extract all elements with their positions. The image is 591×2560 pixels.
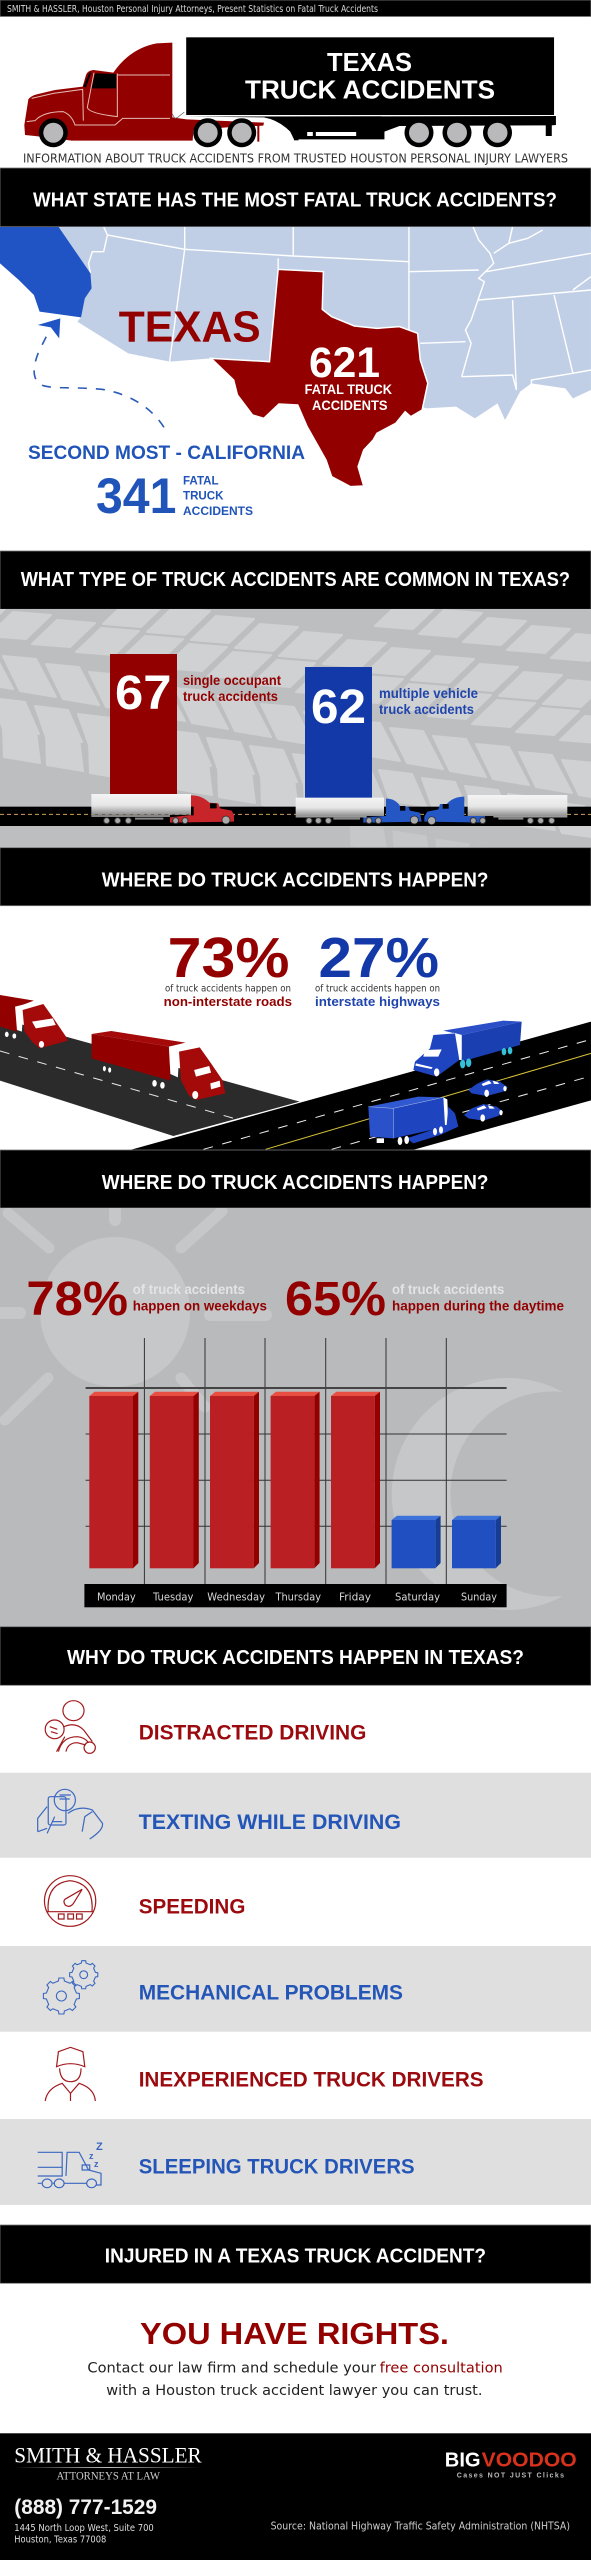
row: distracted driving: [45, 1701, 366, 1753]
California stat 341: [97, 476, 252, 515]
bar chart by weekday: [84, 1338, 507, 1607]
top attribution bar: [0, 0, 591, 16]
stat 73%: non-interstate roads: [164, 994, 292, 1009]
panel: accident types: [0, 609, 591, 848]
US states map: [0, 227, 591, 487]
call to action: with a Houston truck accident lawyer you can trust.: [106, 2383, 483, 2399]
truck wheels: [39, 118, 512, 147]
stat 78%: of truck accidents: [133, 1282, 245, 1297]
agency logo: Cases NOT JUST Clicks: [457, 2472, 564, 2479]
row: texting while driving: TEXTING WHILE DRIVING: [139, 1811, 401, 1834]
heading: where accidents happen (roads): WHERE DO TRUCK ACCIDENTS HAPPEN?: [102, 870, 489, 892]
stat 27%: of truck accidents happen on: [315, 984, 440, 995]
truck tractor cab: [24, 43, 264, 142]
red truck: [91, 794, 234, 824]
road with trucks: [0, 794, 591, 826]
bar: Saturday: [392, 1516, 441, 1568]
icon: gears: [43, 1961, 98, 2014]
firm logo: [14, 2442, 202, 2482]
header truck illustration: [24, 37, 556, 147]
stat 27%: 27%: [318, 926, 439, 990]
bar: Friday: [331, 1392, 380, 1568]
heading: most fatal state: WHAT STATE HAS THE MOST FATAL TRUCK ACCIDENTS?: [33, 190, 557, 212]
stat 78%: 78%: [26, 1273, 128, 1326]
main title: TRUCK ACCIDENTS: [245, 75, 495, 105]
contact details: 1445 North Loop West, Suite 700: [14, 2523, 154, 2534]
stat 27%: [316, 938, 440, 1008]
agency logo: BIG: [445, 2450, 481, 2472]
row: texting while driving: [0, 1773, 591, 1858]
icon: texting: [38, 1789, 103, 1839]
Texas stat 621: [305, 347, 392, 410]
label: single occupant: [183, 675, 281, 701]
heading: most fatal state: [0, 168, 591, 227]
row: mechanical problems: MECHANICAL PROBLEMS: [139, 1981, 403, 2004]
moon background: [392, 1378, 563, 1610]
icon: speedometer: [44, 1876, 96, 1926]
call to action: Contact our law firm and schedule your: [87, 2360, 376, 2376]
heading: why accidents happen: WHY DO TRUCK ACCIDENTS HAPPEN IN TEXAS?: [67, 1647, 524, 1669]
icon: distracted driver: [45, 1701, 95, 1753]
Texas highlighted: [211, 269, 428, 487]
firm logo: ATTORNEYS AT LAW: [56, 2468, 161, 2482]
agency logo: VOODOO: [482, 2450, 577, 2472]
stat 65%: 65%: [285, 1273, 386, 1326]
icon: sleeping truck: z: [94, 2159, 99, 2169]
California stat 341: FATAL: [183, 473, 219, 487]
day labels: Wednesday: [207, 1591, 265, 1604]
contact details: (888) 777-1529: [14, 2496, 157, 2519]
bar: 67 single occupant: 67: [115, 667, 172, 720]
label: single occupant: truck accidents: [183, 689, 278, 704]
main title: TEXAS: [327, 47, 412, 77]
bar: 67 single occupant: [110, 654, 177, 794]
day labels: Saturday: [395, 1591, 440, 1604]
California stat 341: 341: [96, 468, 176, 524]
day labels: Monday: [97, 1591, 136, 1604]
bar: 62 multiple vehicle: [305, 667, 372, 798]
bar: Wednesday: [210, 1392, 259, 1568]
subtitle: INFORMATION ABOUT TRUCK ACCIDENTS FROM TRUSTED HOUSTON PERSONAL INJURY LAWYERS: [23, 152, 568, 166]
main title: [245, 47, 495, 105]
bar: Tuesday: [150, 1392, 199, 1568]
Texas label: TEXAS: [119, 303, 261, 352]
icon: driver with cap: [45, 2047, 95, 2101]
icon: sleeping truck: z: [89, 2151, 94, 2161]
call to action: [87, 2316, 503, 2399]
row: speeding: [44, 1876, 245, 1926]
heading: injured: [0, 2225, 591, 2283]
heading: where accidents happen (roads): [0, 848, 591, 906]
Texas stat 621: ACCIDENTS: [312, 398, 388, 413]
bar: Thursday: [271, 1392, 320, 1568]
label: multiple vehicle: truck accidents: [379, 702, 474, 717]
firm logo: SMITH & HASSLER: [14, 2442, 202, 2467]
panel: road types: [0, 926, 591, 1150]
sun background: [0, 1210, 266, 1420]
stat 27%: interstate highways: [315, 994, 440, 1009]
label: single occupant: single occupant: [183, 673, 281, 688]
call to action: free consultation: [380, 2360, 503, 2376]
day labels: Tuesday: [152, 1591, 194, 1604]
call to action: YOU HAVE RIGHTS.: [140, 2316, 449, 2351]
panel: weekdays and daytime: [0, 1208, 591, 1627]
row: speeding: SPEEDING: [139, 1895, 245, 1918]
heading: why accidents happen: [0, 1627, 591, 1685]
stat 65%: happen during the daytime: [392, 1299, 564, 1314]
contact details: Houston, Texas 77008: [14, 2535, 106, 2546]
row: inexperienced truck drivers: [45, 2047, 484, 2101]
stat 73%: of truck accidents happen on: [165, 984, 291, 995]
stat 65%: [286, 1281, 564, 1316]
row: sleeping truck drivers: SLEEPING TRUCK DRIVERS: [139, 2155, 415, 2178]
trailer with frame: [185, 37, 556, 140]
day labels: Thursday: [275, 1591, 321, 1604]
blue truck left: [296, 798, 422, 824]
dashed arrow to California: [34, 335, 164, 427]
row: sleeping truck drivers: [0, 2119, 591, 2205]
day labels: Friday: [339, 1591, 371, 1604]
row: distracted driving: DISTRACTED DRIVING: [139, 1721, 366, 1744]
contact details: [14, 2496, 157, 2546]
heading: truck accident types: [0, 551, 591, 609]
stat 78%: happen on weekdays: [133, 1299, 267, 1314]
blue truck right: [424, 795, 567, 825]
label: multiple vehicle: [379, 688, 478, 714]
bar: 62 multiple vehicle: 62: [311, 681, 366, 734]
Texas stat 621: FATAL TRUCK: [305, 382, 392, 397]
icon: sleeping truck: [38, 2141, 103, 2188]
stat 65%: of truck accidents: [392, 1282, 504, 1297]
day labels: Sunday: [461, 1591, 497, 1604]
California stat 341: TRUCK: [183, 489, 224, 503]
Texas stat 621: 621: [309, 339, 380, 387]
blue trucks and cars: [368, 1021, 522, 1145]
heading: where accidents happen (days): [0, 1150, 591, 1208]
panel: map of fatal truck accidents: [0, 227, 591, 524]
heading: injured: INJURED IN A TEXAS TRUCK ACCIDENT?: [105, 2245, 486, 2267]
stat 78%: [28, 1281, 266, 1316]
day labels: [84, 1584, 507, 1607]
California stat 341: ACCIDENTS: [183, 504, 253, 518]
top attribution bar: SMITH & HASSLER, Houston Personal Injury Attorneys, Present Statistics on Fatal Truck Accidents: [7, 4, 378, 15]
bar: Sunday: [452, 1516, 501, 1568]
California highlighted: [0, 227, 92, 317]
red trucks: [0, 995, 225, 1100]
stat 73%: [164, 937, 292, 1006]
row: inexperienced truck drivers: INEXPERIENCED TRUCK DRIVERS: [139, 2069, 484, 2092]
label: multiple vehicle: multiple vehicle: [379, 686, 478, 701]
agency logo: [445, 2450, 577, 2479]
row: mechanical problems: [0, 1946, 591, 2032]
footer: [0, 2433, 591, 2560]
icon: sleeping truck: Z: [96, 2141, 103, 2153]
heading: where accidents happen (days): WHERE DO TRUCK ACCIDENTS HAPPEN?: [102, 1172, 489, 1194]
roads: [0, 1018, 591, 1150]
stat 73%: 73%: [168, 926, 290, 990]
second most California label: SECOND MOST - CALIFORNIA: [28, 442, 305, 464]
bar: Monday: [89, 1392, 138, 1568]
